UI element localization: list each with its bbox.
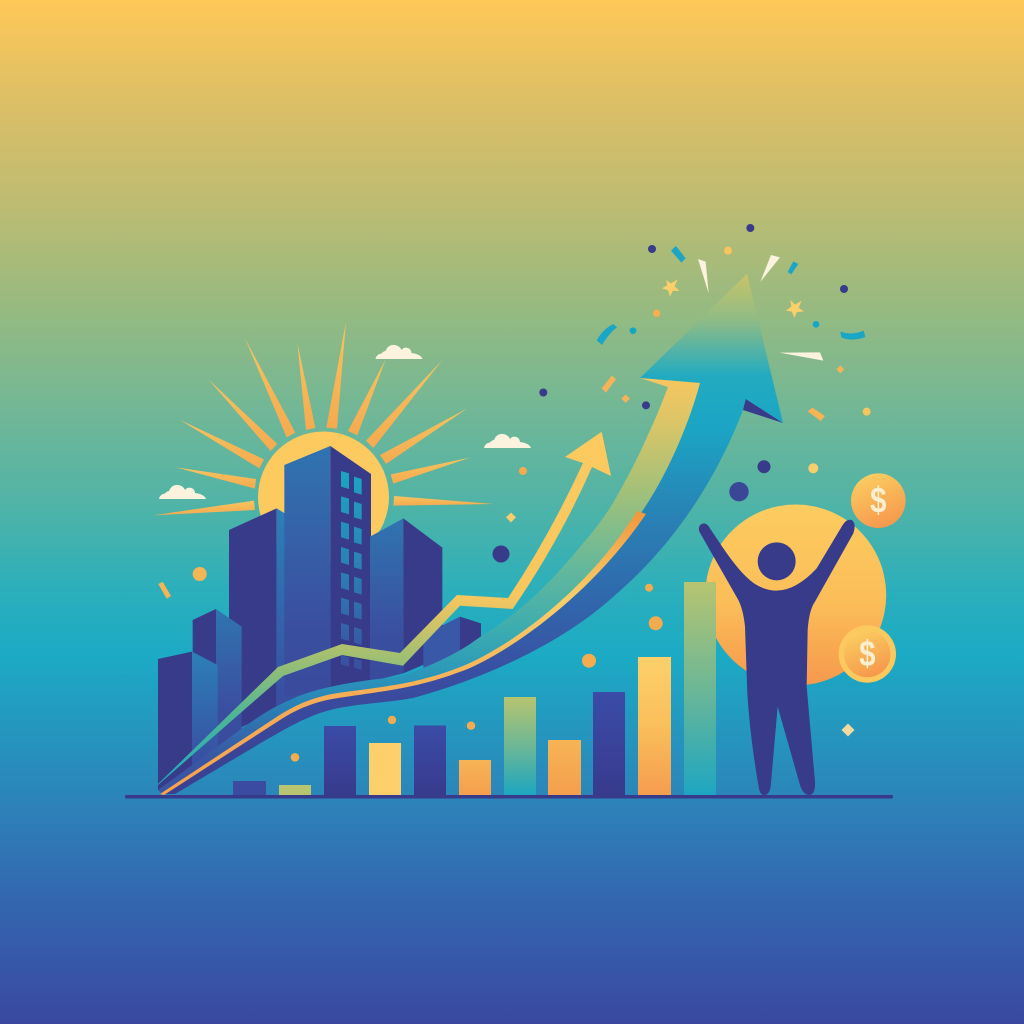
- building: front small left: [158, 652, 218, 790]
- arrow dark notch: [743, 399, 783, 423]
- gold diamond: [506, 512, 516, 522]
- orange confetti: [602, 365, 844, 421]
- orange dash left: [158, 582, 171, 599]
- yellow stars: [662, 279, 804, 318]
- rising chart line arrow: [158, 432, 611, 785]
- cloud right: [484, 434, 531, 448]
- teal streamers: [597, 246, 865, 345]
- large sun circle behind person: [705, 504, 886, 686]
- building: big left: [229, 508, 311, 733]
- sun rays: [153, 322, 494, 515]
- bar 5: [414, 726, 446, 796]
- bar 7: [504, 697, 536, 796]
- orange stripe: [160, 511, 646, 795]
- big growth arrow: [158, 274, 783, 795]
- cloud top: [376, 345, 422, 359]
- person celebrating: [699, 520, 855, 795]
- confetti above arrow: [597, 224, 871, 421]
- city skyline: [158, 446, 481, 790]
- cream diamond: [842, 724, 854, 736]
- bar 2: [279, 785, 311, 796]
- person head: [758, 542, 796, 580]
- yellow dots: [653, 247, 871, 416]
- coin bottom: [839, 625, 896, 683]
- bar chart: [233, 582, 716, 798]
- sun disc: [258, 432, 389, 562]
- sun with rays: [153, 322, 494, 562]
- bar 1: [233, 781, 266, 796]
- navy dots: [642, 224, 848, 409]
- scattered dots and shapes around chart: [158, 388, 855, 762]
- bar 9: [593, 692, 625, 798]
- cloud left: [159, 485, 206, 499]
- building: back small left: [193, 609, 242, 767]
- dollar sign top: $: [870, 480, 886, 520]
- teal dots: [630, 321, 819, 334]
- building: small right: [423, 617, 481, 670]
- building: right: [370, 518, 442, 682]
- person body: [699, 520, 855, 795]
- bar 8: [548, 740, 581, 796]
- yellow-green ribbon: [158, 378, 700, 794]
- pale yellow dot: [808, 463, 818, 473]
- large blue dot: [729, 482, 749, 501]
- coin top: [851, 473, 906, 528]
- tower windows: [341, 471, 362, 670]
- bar 4: [369, 743, 401, 796]
- dot left: [193, 567, 207, 581]
- small dots over bars: [291, 467, 663, 762]
- bar 11: [684, 582, 716, 796]
- bar 6: [459, 760, 491, 796]
- navy dots: [492, 388, 770, 562]
- arrow head and shaft: [160, 274, 783, 794]
- building: center tower: [284, 446, 371, 697]
- dollar sign bottom: $: [859, 633, 875, 673]
- cream shards: [698, 255, 823, 361]
- bar 3: [324, 726, 356, 796]
- bar 10: [638, 657, 671, 796]
- ground line: [125, 795, 893, 798]
